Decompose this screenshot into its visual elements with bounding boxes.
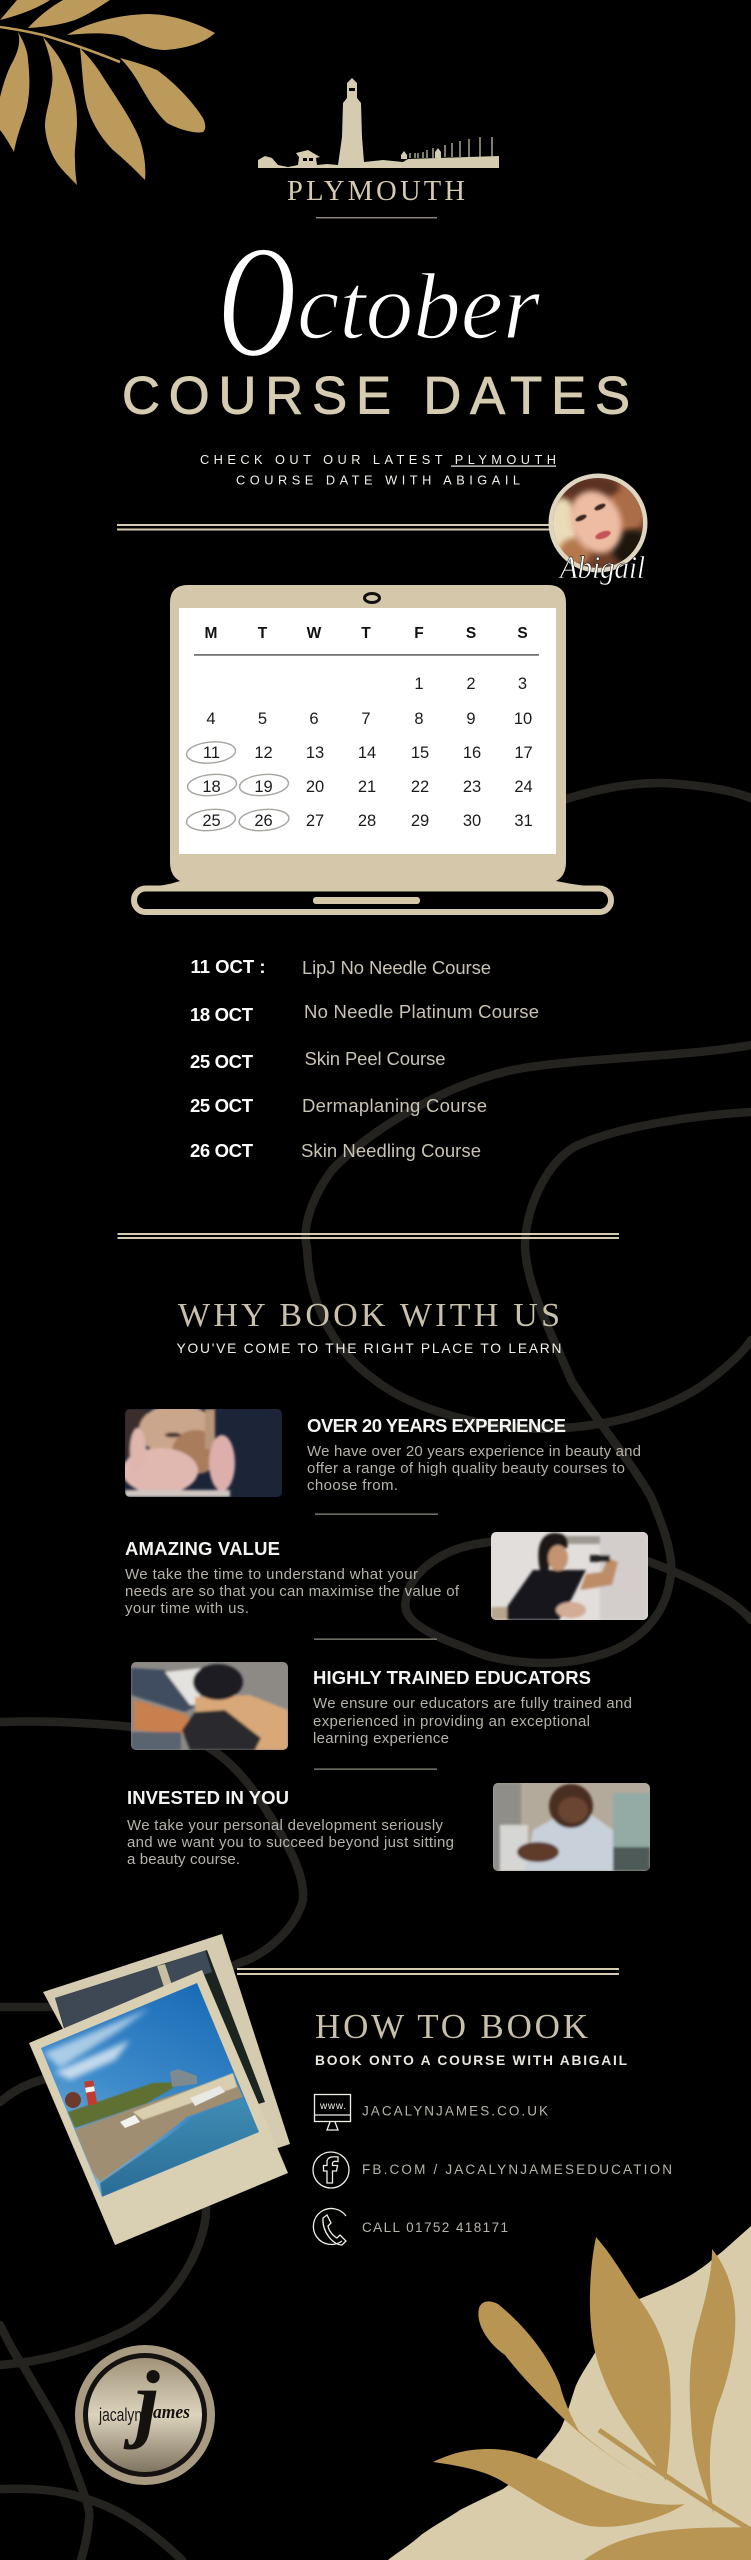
calendar dates: 10: [514, 710, 532, 728]
text block: amazing value: needs are so that you can maximise the value of: [125, 1583, 460, 1600]
calendar dates: 27: [306, 812, 324, 830]
heading: How to book: HOW TO BOOK: [315, 2007, 588, 2046]
date row: 25 Oct skin peel: [190, 1048, 446, 1072]
calendar dates: 26: [254, 812, 273, 830]
calendar screen: [179, 608, 556, 854]
Jacalyn James badge logo: j: [123, 2354, 160, 2451]
calendar dates: 9: [466, 710, 476, 728]
calendar dates: 22: [411, 778, 429, 796]
calendar dates: 31: [514, 812, 533, 830]
weekday header: [205, 625, 528, 642]
laptop base: [134, 888, 611, 912]
Jacalyn James badge logo: jacalyn: [98, 2405, 142, 2425]
date row: 18 Oct: No Needle Platinum Course: [304, 1001, 539, 1022]
weekday header: M: [205, 625, 217, 642]
bottom-right gold leaves: [433, 2237, 751, 2560]
calendar dates: [202, 675, 533, 830]
calendar dates: 6: [309, 710, 319, 728]
text block: invested in you: [127, 1787, 454, 1868]
intro text: CHECK OUT OUR LATEST PLYMOUTH: [200, 452, 556, 467]
script heading: October: ctober: [297, 255, 540, 359]
calendar dates: 8: [414, 710, 424, 728]
text block: highly trained educators: [313, 1667, 632, 1747]
calendar dates: 3: [518, 675, 527, 693]
calendar dates: 1: [414, 675, 424, 693]
Jacalyn James badge logo: ames: [153, 2402, 190, 2423]
calendar dates: 2: [466, 675, 476, 693]
subheading: right place to learn: YOU'VE COME TO THE RIGHT PLACE TO LEARN: [176, 1341, 562, 1356]
date row: 25 Oct dermaplaning: Dermaplaning Course: [302, 1095, 487, 1116]
Jacalyn James badge logo: [75, 2345, 215, 2485]
calendar dates: 16: [463, 744, 481, 762]
date row: 11 Oct: [190, 956, 491, 978]
date row: 25 Oct dermaplaning: [190, 1095, 487, 1116]
hand-drawn date circles: [186, 740, 290, 833]
website text: JACALYNJAMES.CO.UK: [362, 2104, 548, 2118]
calendar dates: 15: [411, 744, 429, 762]
text block: over 20 years experience: We have over 20 years experience in beauty and: [307, 1443, 641, 1460]
calendar dates: 20: [306, 778, 324, 796]
calendar dates: 7: [361, 710, 371, 728]
calendar dates: 24: [514, 778, 533, 796]
weekday header: S: [517, 625, 528, 642]
calendar dates: 29: [411, 812, 429, 830]
date row: 26 Oct: [190, 1140, 481, 1161]
calendar dates: 13: [306, 744, 324, 762]
weekday header: W: [307, 625, 322, 642]
text block: amazing value: [125, 1538, 460, 1617]
text block: over 20 years experience: [307, 1415, 641, 1494]
stem: [599, 2430, 751, 2530]
heading: Why book with us: WHY BOOK WITH US: [178, 1297, 560, 1334]
text block: invested in you: a beauty course.: [127, 1851, 240, 1868]
portrait of Abigail: [546, 474, 652, 572]
weekday header: S: [466, 625, 476, 642]
background swirl lines: [0, 783, 751, 2560]
text block: invested in you: We take your personal development seriously: [127, 1817, 444, 1834]
script label: Abigail: Abigail: [558, 549, 645, 585]
calendar dates: 21: [358, 778, 376, 796]
text block: highly trained educators: HIGHLY TRAINED EDUCATORS: [313, 1667, 591, 1688]
text block: highly trained educators: learning experience: [313, 1730, 449, 1747]
facebook text: FB.COM / JACALYNJAMESEDUCATION: [362, 2162, 672, 2177]
text block: amazing value: your time with us.: [125, 1600, 249, 1617]
calendar dates: 14: [358, 744, 376, 762]
weekday header: T: [258, 625, 268, 642]
polaroid photos of Plymouth: [29, 1934, 290, 2245]
trackpad pill: [313, 897, 420, 904]
date row: 25 Oct dermaplaning: 25 OCT: [190, 1095, 254, 1116]
date row: 25 Oct skin peel: 25 OCT: [190, 1051, 254, 1072]
leaf: bottom: [584, 2527, 751, 2560]
calendar dates: 25: [202, 812, 221, 830]
calendar dates: 11: [203, 744, 220, 762]
date row: 11 Oct: 11 OCT :: [190, 956, 266, 977]
photo: facial treatment with pink gloves: [122, 1404, 282, 1497]
text block: invested in you: and we want you to succeed beyond just sitting: [127, 1834, 454, 1851]
calendar dates: 17: [514, 744, 533, 762]
calendar dates: 28: [358, 812, 376, 830]
laptop body: [146, 585, 600, 892]
back polaroid: [43, 1934, 290, 2148]
date row: 11 Oct: LipJ No Needle Course: [302, 957, 491, 978]
heading: Course Dates: COURSE DATES: [122, 366, 630, 426]
bottom-right cream blob: [388, 2226, 751, 2560]
photo: beautician at work: [491, 1532, 648, 1620]
calendar dates: 4: [206, 710, 216, 728]
weekday header: F: [414, 625, 424, 642]
date row: 25 Oct skin peel: Skin Peel Course: [304, 1048, 446, 1069]
text block: over 20 years experience: offer a range of high quality beauty courses to: [307, 1460, 625, 1477]
intro text: [200, 452, 556, 488]
text block: highly trained educators: experienced in providing an exceptional: [313, 1713, 590, 1730]
text block: highly trained educators: We ensure our educators are fully trained and: [313, 1695, 632, 1712]
date row: 18 Oct: [190, 1001, 539, 1025]
text block: invested in you: INVESTED IN YOU: [127, 1787, 289, 1808]
script heading: October: O: [218, 212, 296, 390]
leaf: tall centre: [590, 2237, 671, 2481]
text block: over 20 years experience: choose from.: [307, 1477, 398, 1494]
photo: lip treatment with black gloves: [131, 1662, 288, 1750]
calendar dates: 19: [254, 778, 273, 796]
date row: 18 Oct: 18 OCT: [190, 1004, 254, 1025]
calendar dates: 5: [258, 710, 267, 728]
laptop with calendar: [134, 585, 611, 912]
leaf: right: [690, 2249, 735, 2514]
top-left gold leaf sprig: [0, 0, 215, 185]
calendar dates: 18: [202, 778, 221, 796]
icon: website monitor: [314, 2094, 350, 2130]
course date list: [190, 956, 539, 1161]
weekday header: T: [361, 625, 371, 642]
icon: telephone: [313, 2208, 346, 2245]
icon: website monitor: www.: [319, 2101, 346, 2112]
Plymouth wordmark: PLYMOUTH: [287, 176, 465, 207]
calendar dates: 23: [463, 778, 481, 796]
leaf: lower left: [433, 2449, 685, 2527]
intro text: COURSE DATE WITH ABIGAIL: [236, 472, 520, 488]
calendar dates: 30: [463, 812, 481, 830]
text block: over 20 years experience: OVER 20 YEARS EXPERIENCE: [307, 1415, 566, 1436]
date row: 26 Oct: Skin Needling Course: [301, 1140, 481, 1161]
leaf: upper left: [478, 2301, 666, 2490]
double divider 2: [118, 1233, 619, 1239]
double divider 1: [117, 524, 550, 530]
Plymouth lighthouse skyline logo: [258, 78, 499, 168]
front polaroid: [29, 1970, 288, 2245]
photo: smiling woman with phone: [493, 1783, 650, 1871]
subheading: book onto a course: BOOK ONTO A COURSE WITH ABIGAIL: [315, 2053, 627, 2068]
date row: 26 Oct: 26 OCT: [190, 1140, 254, 1161]
webcam: [364, 594, 380, 602]
phone text: CALL 01752 418171: [362, 2220, 508, 2235]
calendar dates: 12: [254, 744, 273, 762]
double divider 3: [237, 1968, 619, 1975]
icon: facebook: [313, 2152, 349, 2188]
text block: amazing value: AMAZING VALUE: [125, 1538, 280, 1559]
rule under wordmark: [316, 217, 437, 218]
text block: amazing value: We take the time to understand what your: [125, 1566, 418, 1583]
Plymouth Hoe photo: [41, 1983, 259, 2197]
